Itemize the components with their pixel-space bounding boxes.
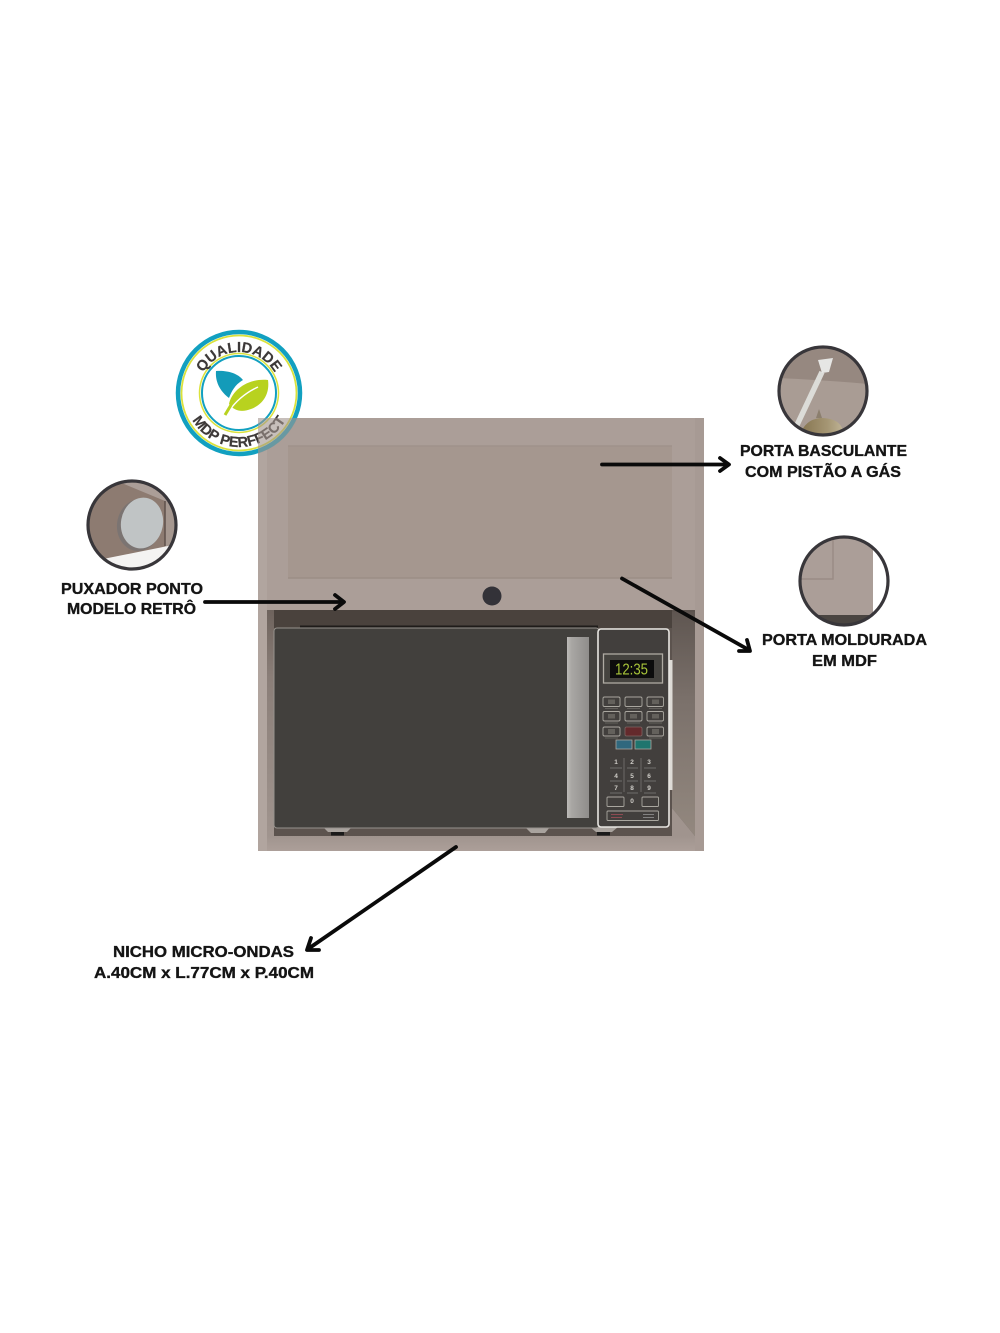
detail circle: moulded door xyxy=(800,537,890,627)
label: puxador ponto xyxy=(61,581,203,618)
number keypad: 5 xyxy=(630,773,634,780)
control panel xyxy=(598,629,672,827)
microwave door xyxy=(274,628,599,828)
door moulding panel xyxy=(288,446,672,578)
label: porta basculante: COM PISTÃO A GÁS xyxy=(745,463,901,481)
function keys xyxy=(603,697,664,749)
leaf icon xyxy=(216,371,268,415)
quality badge xyxy=(176,330,302,456)
detail circle: knob xyxy=(86,479,178,571)
label: porta moldurada: EM MDF xyxy=(812,653,877,670)
label: puxador ponto: MODELO RETRÔ xyxy=(67,600,196,618)
detail circle: gas piston xyxy=(778,346,868,436)
cabinet xyxy=(258,418,704,851)
number keypad: 8 xyxy=(630,785,634,792)
label: nicho micro-ondas: NICHO MICRO-ONDAS xyxy=(113,944,294,961)
arrow: porta basculante xyxy=(602,458,729,471)
label: porta basculante xyxy=(740,443,907,481)
bottom keys xyxy=(607,797,658,820)
door handle knob xyxy=(482,586,502,606)
number keypad: 6 xyxy=(647,773,651,780)
number keypad: 3 xyxy=(647,759,651,766)
arrow: nicho xyxy=(307,847,456,950)
label: porta moldurada xyxy=(762,632,927,670)
microwave niche xyxy=(267,610,695,851)
clock display xyxy=(604,654,662,683)
badge lettering xyxy=(192,342,284,448)
arrow: puxador xyxy=(205,595,344,609)
arrow: porta moldurada xyxy=(622,578,750,651)
door handle xyxy=(567,637,589,818)
label: porta basculante: PORTA BASCULANTE xyxy=(740,443,907,460)
label: porta moldurada: PORTA MOLDURADA xyxy=(762,632,927,649)
microwave xyxy=(274,628,672,836)
number keypad: 9 xyxy=(647,785,651,792)
number keypad: 2 xyxy=(630,759,634,766)
badge lettering: MDP PERFFECT xyxy=(192,414,284,448)
number keypad: 7 xyxy=(614,785,618,792)
number keypad: 4 xyxy=(614,773,618,780)
number keypad: 0 xyxy=(630,798,634,805)
microwave feet xyxy=(323,827,618,836)
label: puxador ponto: PUXADOR PONTO xyxy=(61,581,203,598)
label: nicho micro-ondas xyxy=(94,944,314,982)
number keypad: 1 xyxy=(614,759,618,766)
badge lettering: QUALIDADE xyxy=(197,342,282,372)
number keypad xyxy=(610,758,656,805)
label: nicho micro-ondas: A.40CM x L.77CM x P.40CM xyxy=(94,965,314,982)
clock display: 12:35 xyxy=(615,662,648,678)
